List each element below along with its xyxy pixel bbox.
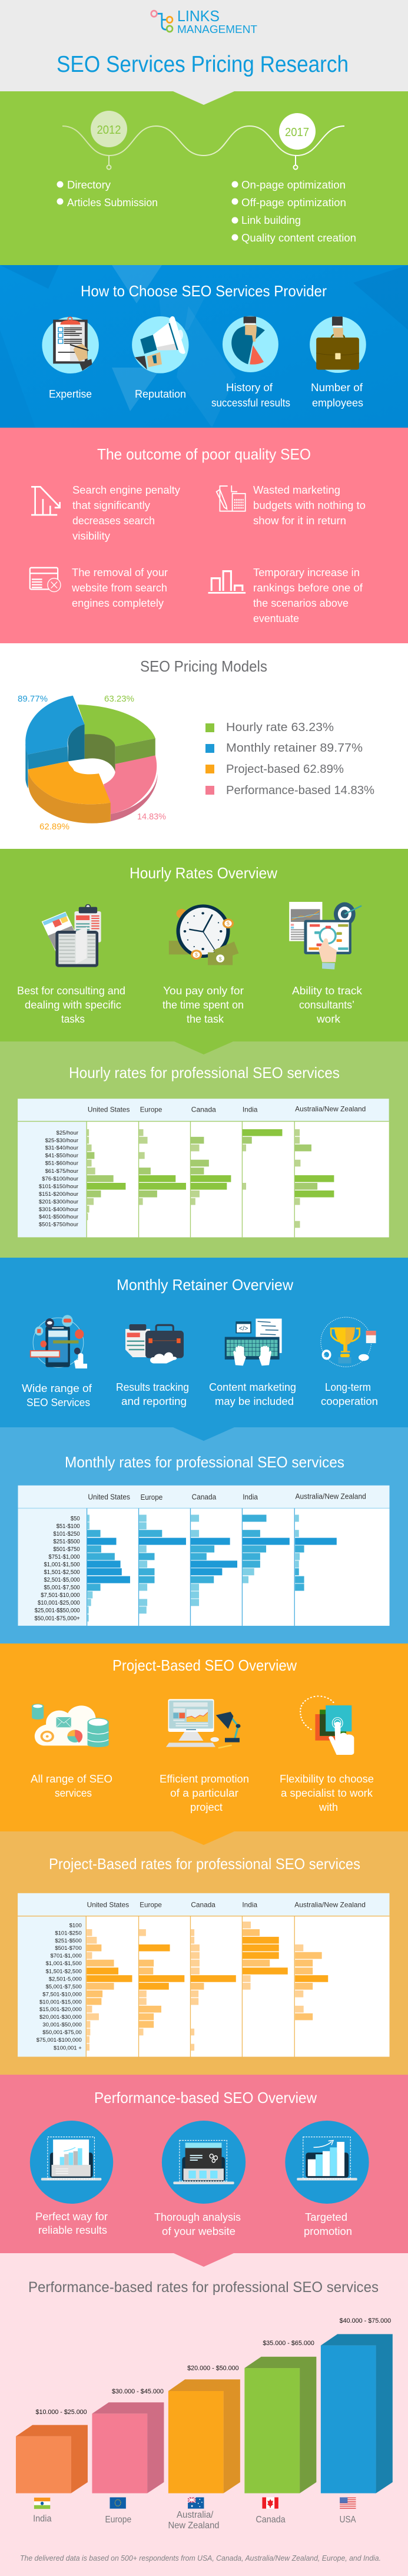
list 2017: On-page optimization <box>241 179 346 191</box>
text: wasted budgets: Wasted marketing <box>253 484 340 496</box>
donut labels: 89.77% <box>18 694 48 704</box>
flag and label: Canada <box>256 2497 286 2525</box>
chart: monthly rates by region: $751-$1,000 <box>48 1554 80 1560</box>
text: removal of website: website from search <box>71 582 167 594</box>
label: history of successful results: History of <box>226 382 273 393</box>
chart: project rates by region: Canada <box>191 1900 215 1909</box>
icon: trophy <box>321 1317 376 1367</box>
legend <box>205 721 374 797</box>
chart: monthly rates by region: $101-$250 <box>53 1530 80 1537</box>
chart: monthly rates by region: $2,501-$5,000 <box>44 1577 80 1583</box>
legend: Performance-based 14.83% <box>226 784 374 797</box>
heading: Project-Based rates for professional SEO services <box>49 1855 360 1873</box>
heading: Monthly rates for professional SEO services <box>65 1453 344 1471</box>
icon: clipboard checklist <box>42 317 99 373</box>
text: search engine penalty: visibility <box>72 530 110 542</box>
text: all range: services <box>55 1787 92 1799</box>
footnote: The delivered data is based on 500+ respondents from USA, Canada, Australia/New Zealand, Europe, and India. <box>20 2554 381 2562</box>
text: content marketing: Content marketing <box>209 1381 296 1393</box>
text: perfect way: reliable results <box>38 2224 107 2236</box>
bar: Australia/New Zealand <box>168 2365 240 2494</box>
chart: hourly rates by region: $51-$60/hour <box>45 1160 79 1167</box>
flag and label: Europe: Europe <box>105 2515 131 2525</box>
donut labels: 62.89% <box>39 822 69 832</box>
chart: project rates by region: Europe <box>140 1900 162 1909</box>
chart: monthly rates by region: $251-$500 <box>53 1539 80 1545</box>
marker 2017 <box>279 113 316 170</box>
chart: project rates by region: $701-$1,000 <box>50 1953 82 1959</box>
text: search engine penalty: that significantly <box>72 500 150 511</box>
chart: hourly rates by region: $31-$40/hour <box>45 1145 79 1152</box>
text: efficient promotion: Efficient promotion <box>160 1773 249 1785</box>
icon: falling chart <box>31 487 60 515</box>
chart: monthly rates by region: $25,001-$$50,000 <box>35 1608 80 1614</box>
icon: keyboard coding <box>225 1318 282 1365</box>
text: targeted promotion <box>304 2211 352 2237</box>
heading: SEO Pricing Models <box>140 657 267 675</box>
text: efficient promotion: of a particular <box>170 1787 238 1799</box>
chart: hourly rates by region: $41-$50/hour <box>45 1153 79 1159</box>
chart: project rates by region: Australia/New Zealand <box>294 1900 366 1909</box>
chart: hourly rates by region: $501-$750/hour <box>39 1222 79 1228</box>
icon: tap and select <box>300 1696 354 1755</box>
text: long-term cooperation: Long-term <box>325 1381 371 1393</box>
chart: hourly rates by region: $25-$30/hour <box>45 1137 79 1144</box>
chart: hourly rates by region: $151-$200/hour <box>39 1191 79 1198</box>
bar: Canada <box>244 2340 316 2494</box>
text: wasted budgets <box>253 484 366 527</box>
chart: hourly rates by region <box>18 1099 389 1237</box>
text: track consultants <box>292 985 363 1025</box>
icon: pencil and calculator <box>217 485 246 511</box>
chart: hourly rates by region: $201-$300/hour <box>39 1199 79 1205</box>
icon: tracking dashboard <box>289 902 361 970</box>
icon: browser removed <box>30 568 61 592</box>
chart: monthly rates by region: $10,001-$25,000 <box>38 1600 80 1606</box>
text: efficient promotion: project <box>190 1801 223 1813</box>
panel: monthly retainer overview <box>0 1258 408 1427</box>
chart: monthly rates by region <box>18 1486 390 1626</box>
chart: project rates by region: $7,501-$10,000 <box>42 1991 82 1998</box>
heading: Monthly Retainer Overview <box>117 1276 293 1294</box>
text: pay only for time: You pay only for <box>163 985 244 997</box>
icon: pie chart with hand <box>223 316 278 372</box>
icon: bars with drop <box>208 571 246 593</box>
heading: Project-Based SEO Overview <box>112 1656 297 1674</box>
text: search engine penalty: Search engine penalty <box>72 484 180 496</box>
flag and label: Australia/New Zealand: New Zealand <box>168 2521 220 2531</box>
bar: USA: $40.000 - $75.000 <box>340 2318 391 2324</box>
text: results tracking: Results tracking <box>116 1381 189 1393</box>
text: long-term cooperation <box>321 1381 378 1407</box>
label: number of employees <box>311 382 363 409</box>
text: content marketing <box>209 1381 296 1407</box>
flag and label: Australia/New Zealand <box>168 2497 220 2531</box>
chart: project rates by region: $1,501-$2,500 <box>46 1968 82 1975</box>
text: flexibility: with <box>319 1801 338 1813</box>
chart: project rates by region <box>18 1893 390 2056</box>
text: efficient promotion <box>160 1773 249 1813</box>
donut labels <box>18 694 166 832</box>
chart: monthly rates by region: $501-$750 <box>53 1546 80 1553</box>
text: track consultants: Ability to track <box>292 985 363 997</box>
legend: Project-based 62.89% <box>226 763 344 776</box>
text: best for consulting: dealing with specific <box>25 999 121 1011</box>
chart: project rates by region: India <box>242 1900 257 1909</box>
bar: Europe: $30.000 - $45.000 <box>112 2389 164 2395</box>
text: flexibility: Flexibility to choose <box>280 1773 374 1785</box>
chart: project rates by region: $1,001-$1,500 <box>46 1960 82 1967</box>
bar: USA <box>321 2318 393 2494</box>
text: best for consulting: Best for consulting and <box>17 985 125 997</box>
panel: outcome of poor quality SEO <box>0 428 408 643</box>
chart: monthly rates by region: $7,501-$10,000 <box>41 1592 80 1599</box>
text: content marketing: may be included <box>215 1396 294 1407</box>
text: long-term cooperation: cooperation <box>321 1396 378 1407</box>
text: best for consulting: tasks <box>61 1013 85 1025</box>
bar: Australia/New Zealand: $20.000 - $50.000 <box>187 2365 239 2372</box>
text: targeted promotion: Targeted <box>305 2211 347 2223</box>
text: thorough analysis: of your website <box>162 2226 235 2237</box>
header notch <box>173 91 234 105</box>
chart: monthly rates by region: Canada <box>192 1493 216 1502</box>
flag and label: Canada: Canada <box>256 2515 286 2525</box>
chart: monthly rates by region: $50,001-$75,000+ <box>34 1615 80 1622</box>
chart: monthly rates by region: Australia/New Zealand <box>296 1492 366 1501</box>
chart: hourly rates by region: $301-$400/hour <box>39 1206 79 1213</box>
icon: laptop bars <box>285 2121 369 2204</box>
chart: project rates by region: 30,001-$50,000 <box>42 2022 82 2028</box>
label: reputation: Reputation <box>135 388 186 400</box>
text: search engine penalty <box>72 484 180 542</box>
icon: monitor and lamp <box>166 1699 240 1748</box>
text: track consultants: work <box>316 1013 341 1025</box>
icon: clock and money: $ <box>219 956 222 961</box>
icon: phone services <box>30 1315 87 1368</box>
chart: hourly rates by region: $101-$150/hour <box>39 1183 79 1190</box>
chart: project rates by region: $20,001-$30,000 <box>39 2014 82 2021</box>
chart: project rates by region: $75,001-$100,000 <box>37 2037 82 2043</box>
chart: monthly rates by region: $50 <box>71 1516 80 1522</box>
list 2012: Directory <box>67 179 111 191</box>
text: temporary increase: Temporary increase in <box>253 567 360 578</box>
chart: project rates by region: $10,001-$15,000 <box>39 1999 82 2005</box>
list 2017: Quality content creation <box>241 232 356 244</box>
text: all range: All range of SEO <box>31 1773 112 1785</box>
section arrow <box>173 1427 234 1441</box>
text: wide range: Wide range of <box>22 1383 92 1394</box>
text: track consultants: consultants’ <box>299 999 354 1011</box>
marker 2012 <box>91 111 127 170</box>
panel: how to choose provider <box>0 265 408 428</box>
panel: SEO pricing models <box>0 643 408 849</box>
heading: Performance-based SEO Overview <box>94 2089 317 2107</box>
text: temporary increase: eventuate <box>253 613 299 624</box>
chart: 3D bars by region <box>16 2318 393 2531</box>
label: number of employees: Number of <box>311 382 363 393</box>
wave line <box>62 126 344 156</box>
list 2012 <box>57 179 158 209</box>
legend: Hourly rate 63.23% <box>226 721 334 734</box>
chart: hourly rates by region: $61-$75/hour <box>45 1168 79 1175</box>
bar: India: $10.000 - $25.000 <box>36 2409 87 2416</box>
panel: project-based overview <box>0 1644 408 1831</box>
flag and label: Europe <box>105 2497 131 2525</box>
icon: documents and tablet <box>42 905 101 967</box>
panel: monthly rates table <box>0 1427 408 1644</box>
chart: monthly rates by region: $5,001-$7,500 <box>44 1585 80 1591</box>
chart: project rates by region: $100 <box>69 1922 82 1929</box>
text: wasted budgets: budgets with nothing to <box>253 500 366 511</box>
chart: project rates by region: $50,001-$75,00 <box>42 2029 82 2036</box>
text: flexibility <box>280 1773 374 1813</box>
chart: project rates by region: $100,001 + <box>54 2045 82 2051</box>
text: temporary increase: the scenarios above <box>253 597 349 609</box>
text: perfect way: Perfect way for <box>35 2211 108 2223</box>
label: history of successful results: successful results <box>211 397 290 409</box>
list 2012: Articles Submission <box>67 197 158 209</box>
chart: 3D donut <box>25 696 158 824</box>
text: thorough analysis <box>154 2211 241 2237</box>
text: results tracking: and reporting <box>121 1396 187 1407</box>
flag and label: USA: USA <box>340 2515 356 2525</box>
text: temporary increase <box>253 567 363 624</box>
marker 2017: 2017 <box>285 126 309 139</box>
text: flexibility: a specialist to work <box>281 1787 373 1799</box>
text: targeted promotion: promotion <box>304 2226 352 2237</box>
heading: Performance-based rates for professional SEO services <box>28 2279 379 2296</box>
chart: monthly rates by region: $51-$100 <box>57 1523 80 1530</box>
logo: MANAGEMENT <box>177 24 257 35</box>
list 2017 <box>232 179 356 244</box>
icon: report and briefcase <box>125 1324 184 1364</box>
logo: LINKS <box>177 7 220 25</box>
chart: monthly rates by region: $1,501-$2,500 <box>44 1569 80 1576</box>
text: removal of website: The removal of your <box>72 567 168 578</box>
title: SEO Services Pricing Research <box>57 52 349 77</box>
text: search engine penalty: decreases search <box>72 515 155 527</box>
text: wasted budgets: show for it in return <box>253 515 346 527</box>
list 2017: Off-page optimization <box>241 197 346 209</box>
text: wide range <box>22 1383 92 1408</box>
panel: timeline 2012 to 2017 <box>0 91 408 265</box>
flag and label: India <box>33 2498 52 2524</box>
chart: hourly rates by region: $401-$500/hour <box>39 1214 79 1221</box>
chart: monthly rates by region: $1,001-$1,500 <box>44 1562 80 1568</box>
icon: laptop growth <box>30 2121 113 2204</box>
label: history of successful results <box>211 382 290 409</box>
panel: header <box>0 0 408 94</box>
text: best for consulting <box>17 985 125 1025</box>
icon: clock and money: $ <box>227 921 230 927</box>
section arrow <box>174 1041 233 1054</box>
flag and label: USA <box>340 2497 356 2525</box>
label: number of employees: employees <box>312 397 363 409</box>
icon: briefcase <box>310 316 366 373</box>
chart: project rates by region: $501-$700 <box>55 1945 82 1952</box>
text: removal of website: engines completely <box>72 597 164 609</box>
section arrow <box>173 1831 234 1845</box>
heading: How to Choose SEO Services Provider <box>81 282 327 300</box>
chart: project rates by region: $15,001-$20,000 <box>39 2006 82 2013</box>
panel: hourly rates table <box>0 1041 408 1258</box>
donut labels: 63.23% <box>104 694 134 704</box>
chart: hourly rates by region: $76-$100/hour <box>42 1176 79 1182</box>
chart: hourly rates by region: Europe <box>140 1105 162 1113</box>
heading: Hourly Rates Overview <box>130 864 277 882</box>
chart: project rates by region: $5,001-$7,500 <box>46 1983 82 1990</box>
chart: hourly rates by region: United States <box>88 1105 130 1113</box>
heading: The outcome of poor quality SEO <box>97 445 311 463</box>
chart: hourly rates by region: Canada <box>191 1105 216 1113</box>
text: removal of website <box>71 567 168 609</box>
text: wide range: SEO Services <box>26 1397 90 1408</box>
panel: performance-based overview <box>0 2075 408 2253</box>
chart: project rates by region: $101-$250 <box>55 1930 82 1936</box>
text: pay only for time <box>162 985 244 1025</box>
chart: monthly rates by region: United States <box>88 1493 130 1502</box>
chart: project rates by region: United States <box>87 1900 129 1909</box>
legend: Monthly retainer 89.77% <box>226 742 363 755</box>
icon: megaphone <box>132 316 189 373</box>
text: all range <box>31 1773 112 1799</box>
panel: performance-based rates <box>0 2253 408 2576</box>
logo <box>151 7 257 35</box>
icon: clock and money: $ <box>195 952 198 958</box>
text: temporary increase: rankings before one of <box>253 582 363 594</box>
text: results tracking <box>116 1381 189 1407</box>
icon: clock and money <box>169 904 238 965</box>
bar: India <box>16 2409 88 2494</box>
text: pay only for time: the time spent on <box>162 999 244 1011</box>
text: perfect way <box>35 2211 108 2236</box>
chart: monthly rates by region: Europe <box>141 1493 162 1502</box>
chart: monthly rates by region: India <box>243 1493 258 1502</box>
chart: project rates by region: $2,501-5,000 <box>49 1976 82 1982</box>
label: expertise: Expertise <box>49 388 92 400</box>
panel: hourly rates overview <box>0 849 408 1041</box>
icon: laptop analysis <box>162 2121 246 2204</box>
flag and label: India: India <box>33 2514 52 2524</box>
section arrow <box>174 2253 234 2267</box>
chart: hourly rates by region: Australia/New Zealand <box>295 1105 366 1113</box>
icon: cloud and databases <box>32 1704 109 1747</box>
flag and label: Australia/New Zealand: Australia/ <box>177 2510 214 2520</box>
chart: project rates by region: $251-$500 <box>55 1937 82 1944</box>
chart: hourly rates by region: India <box>243 1105 258 1113</box>
marker 2012: 2012 <box>97 124 121 137</box>
text: pay only for time: the task <box>187 1013 224 1025</box>
donut labels: 14.83% <box>137 812 166 822</box>
text: thorough analysis: Thorough analysis <box>154 2211 241 2223</box>
chart: hourly rates by region: $25/hour <box>57 1130 79 1136</box>
icon: keyboard coding: </> <box>239 1325 248 1332</box>
heading: Hourly rates for professional SEO services <box>69 1064 340 1082</box>
bar: Canada: $35.000 - $65.000 <box>263 2340 314 2347</box>
panel: project-based rates table <box>0 1831 408 2075</box>
list 2017: Link building <box>241 214 301 226</box>
bar: Europe <box>92 2389 164 2494</box>
